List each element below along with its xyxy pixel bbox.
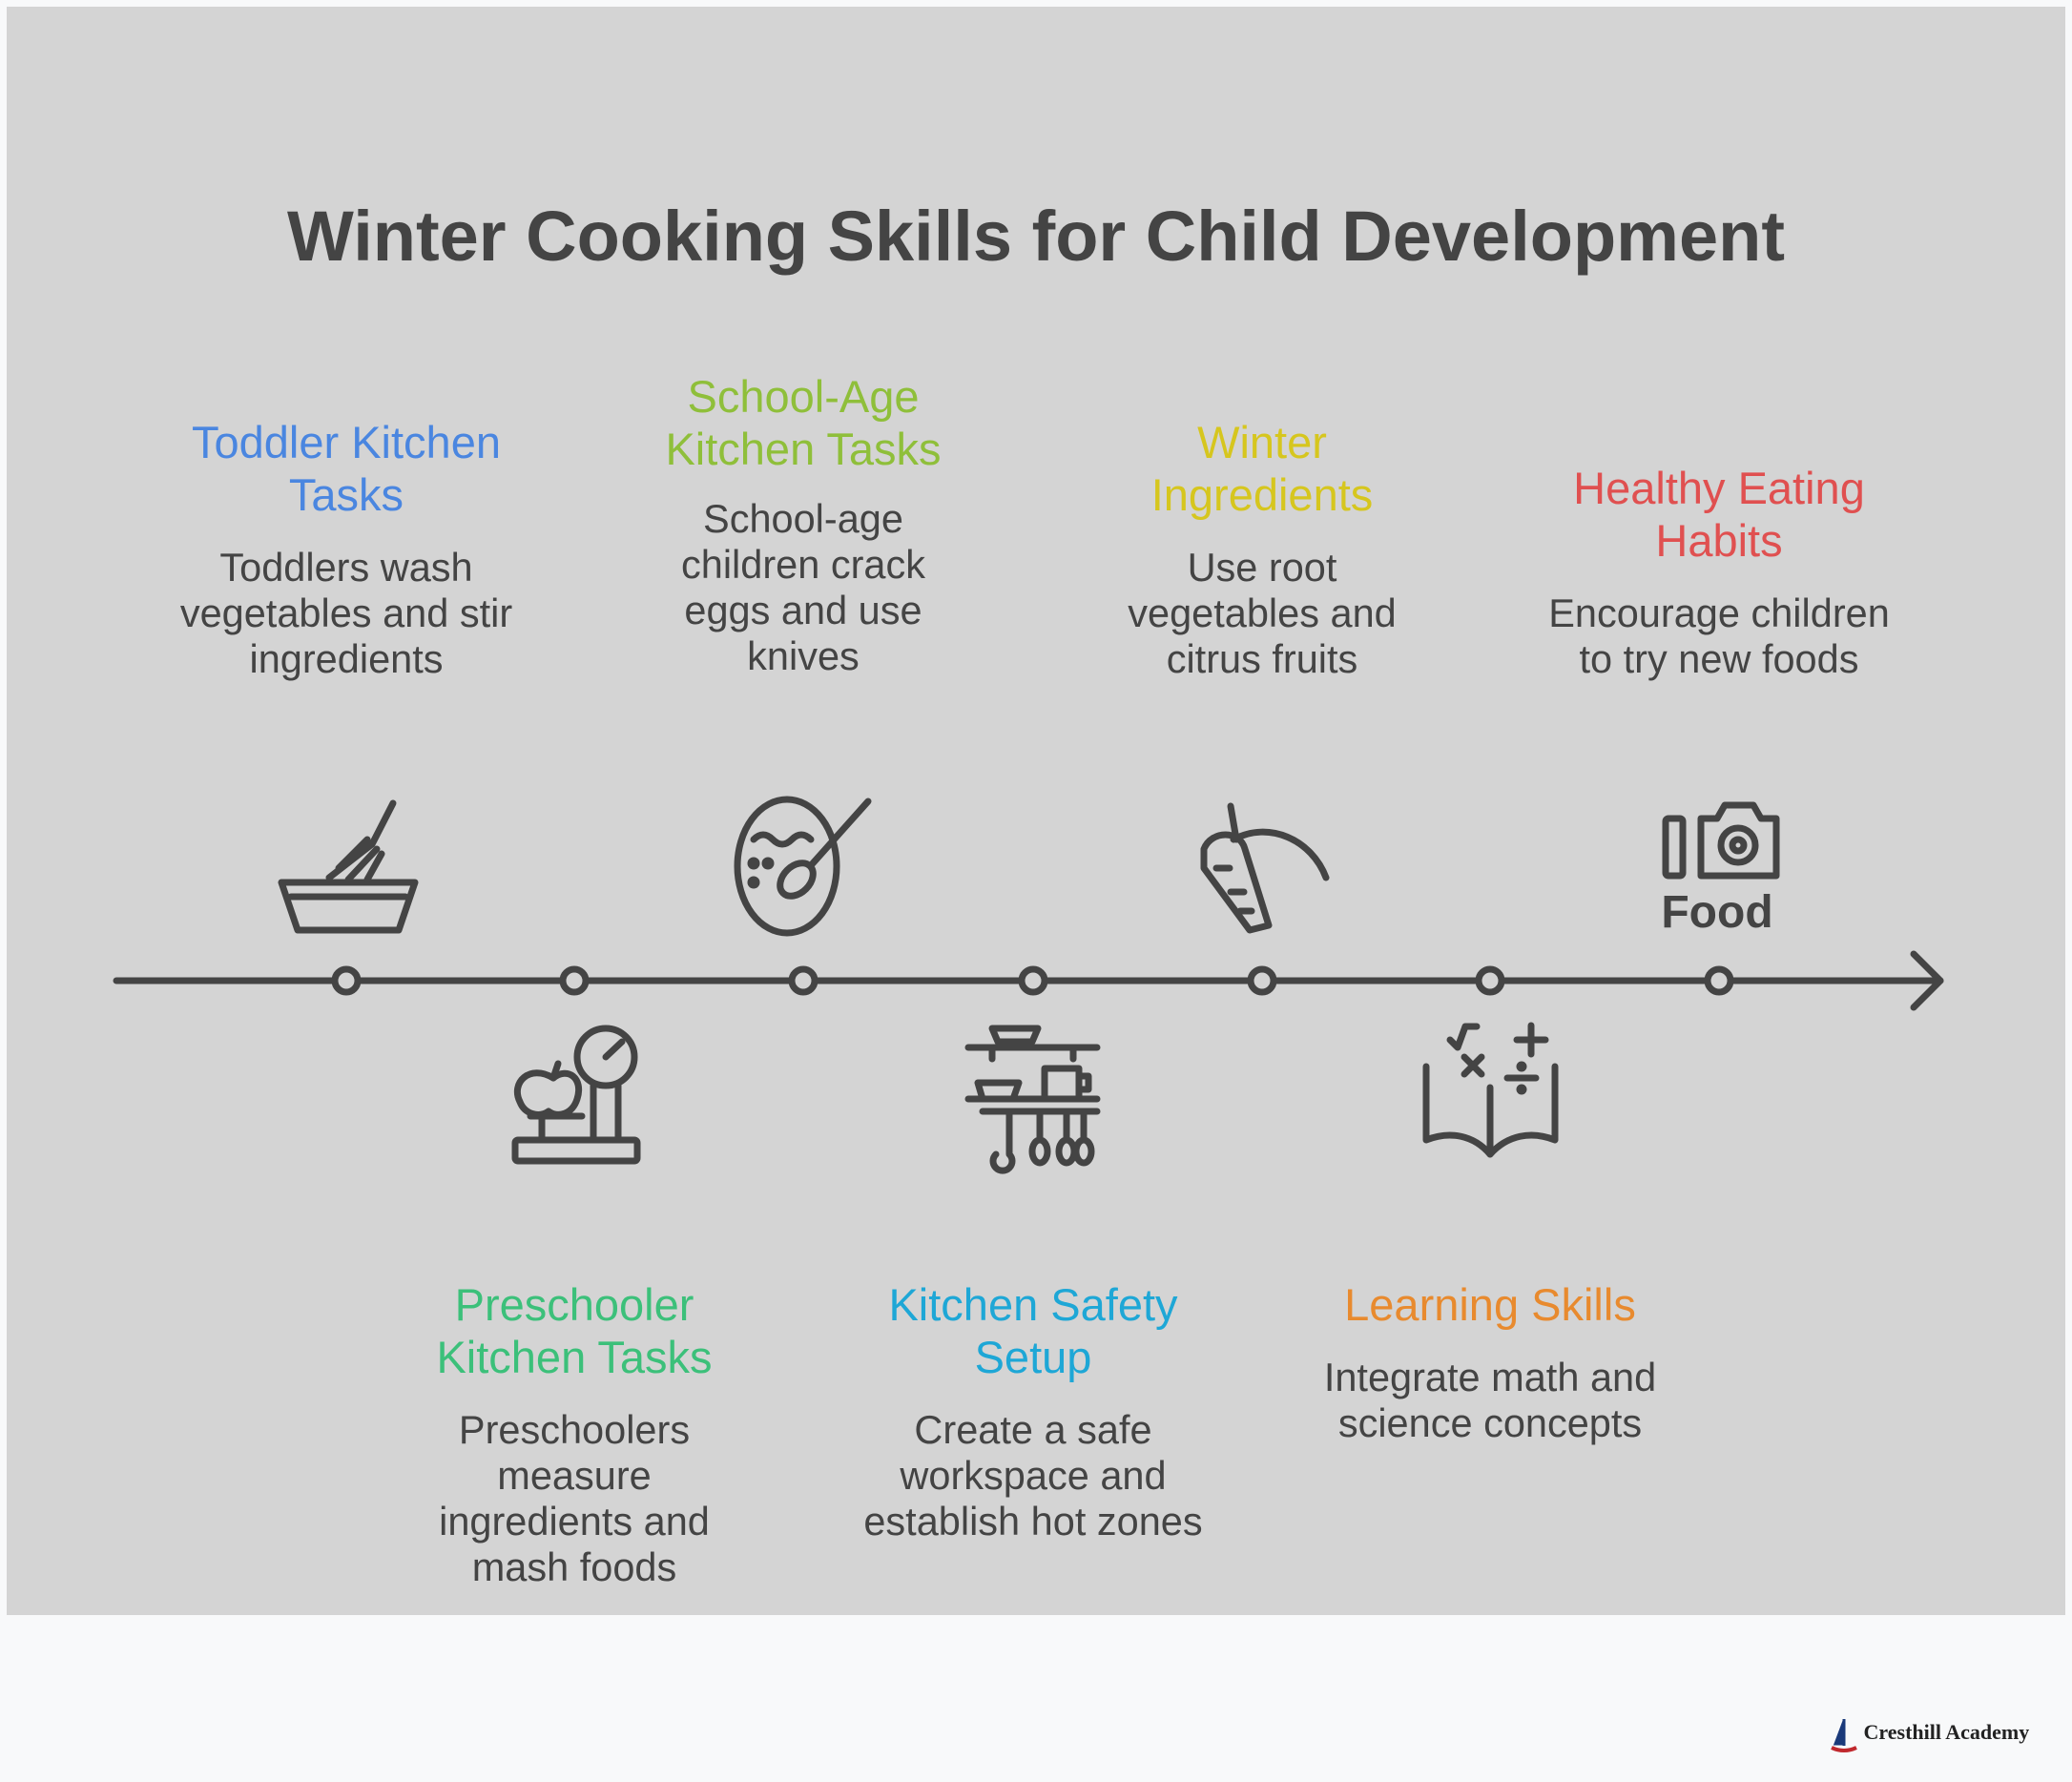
text: healthy eating: Encourage children bbox=[1548, 591, 1890, 635]
text: toddler bbox=[180, 417, 512, 681]
text: toddler: Toddlers wash bbox=[219, 545, 473, 590]
text: kitchen safety: Create a safe bbox=[914, 1407, 1152, 1452]
text: preschooler: measure bbox=[497, 1453, 652, 1498]
timeline arrow bbox=[116, 954, 1940, 1007]
text: preschooler bbox=[436, 1279, 713, 1589]
text: winter ingredients bbox=[1128, 417, 1397, 681]
text: preschooler: ingredients and bbox=[439, 1499, 710, 1544]
text: winter ingredients: Winter bbox=[1197, 417, 1327, 467]
text: healthy eating: to try new foods bbox=[1580, 636, 1858, 681]
text: toddler: Tasks bbox=[289, 469, 404, 520]
text: kitchen safety: Setup bbox=[975, 1332, 1091, 1382]
text: school-age: Kitchen Tasks bbox=[665, 424, 942, 474]
text: healthy eating bbox=[1548, 463, 1890, 681]
text: kitchen safety: workspace and bbox=[900, 1453, 1167, 1498]
text: healthy eating: Habits bbox=[1655, 515, 1783, 566]
text: kitchen safety: Kitchen Safety bbox=[888, 1279, 1178, 1330]
title: Winter Cooking Skills for Child Development bbox=[287, 197, 1785, 276]
icon: camera with food label: Food bbox=[1661, 887, 1773, 938]
text: school-age: School-age bbox=[703, 496, 903, 541]
icon: kitchen shelf bbox=[968, 1028, 1097, 1171]
logo: Cresthill Academy bbox=[1864, 1720, 2029, 1744]
text: school-age: knives bbox=[747, 633, 860, 678]
icon: book with math bbox=[1426, 1026, 1555, 1154]
text: learning skills: Integrate math and bbox=[1324, 1355, 1656, 1399]
text: toddler: ingredients bbox=[249, 636, 444, 681]
icon: egg with spoon bbox=[737, 799, 868, 933]
text: school-age: School-Age bbox=[687, 371, 920, 422]
text: winter ingredients: vegetables and bbox=[1128, 591, 1397, 635]
text: kitchen safety bbox=[863, 1279, 1203, 1544]
icon: bowl and whisk bbox=[281, 803, 415, 930]
text: winter ingredients: Use root bbox=[1188, 545, 1336, 590]
icon: scale with apple bbox=[515, 1028, 637, 1161]
text: school-age bbox=[665, 371, 942, 678]
icon: camera with food label bbox=[1661, 805, 1776, 938]
icon: carrot bbox=[1204, 806, 1326, 930]
text: healthy eating: Healthy Eating bbox=[1573, 463, 1865, 513]
text: school-age: eggs and use bbox=[684, 588, 922, 632]
text: winter ingredients: Ingredients bbox=[1151, 469, 1373, 520]
text: learning skills: science concepts bbox=[1338, 1400, 1642, 1445]
text: learning skills bbox=[1324, 1279, 1656, 1445]
text: school-age: children crack bbox=[681, 542, 925, 587]
text: winter ingredients: citrus fruits bbox=[1167, 636, 1357, 681]
text: preschooler: Preschoolers bbox=[459, 1407, 690, 1452]
text: kitchen safety: establish hot zones bbox=[863, 1499, 1203, 1544]
text: preschooler: mash foods bbox=[472, 1544, 676, 1589]
text: preschooler: Preschooler bbox=[455, 1279, 694, 1330]
text: toddler: Toddler Kitchen bbox=[192, 417, 501, 467]
text: preschooler: Kitchen Tasks bbox=[436, 1332, 713, 1382]
text: learning skills: Learning Skills bbox=[1344, 1279, 1636, 1330]
text: toddler: vegetables and stir bbox=[180, 591, 512, 635]
logo bbox=[1831, 1719, 2030, 1752]
